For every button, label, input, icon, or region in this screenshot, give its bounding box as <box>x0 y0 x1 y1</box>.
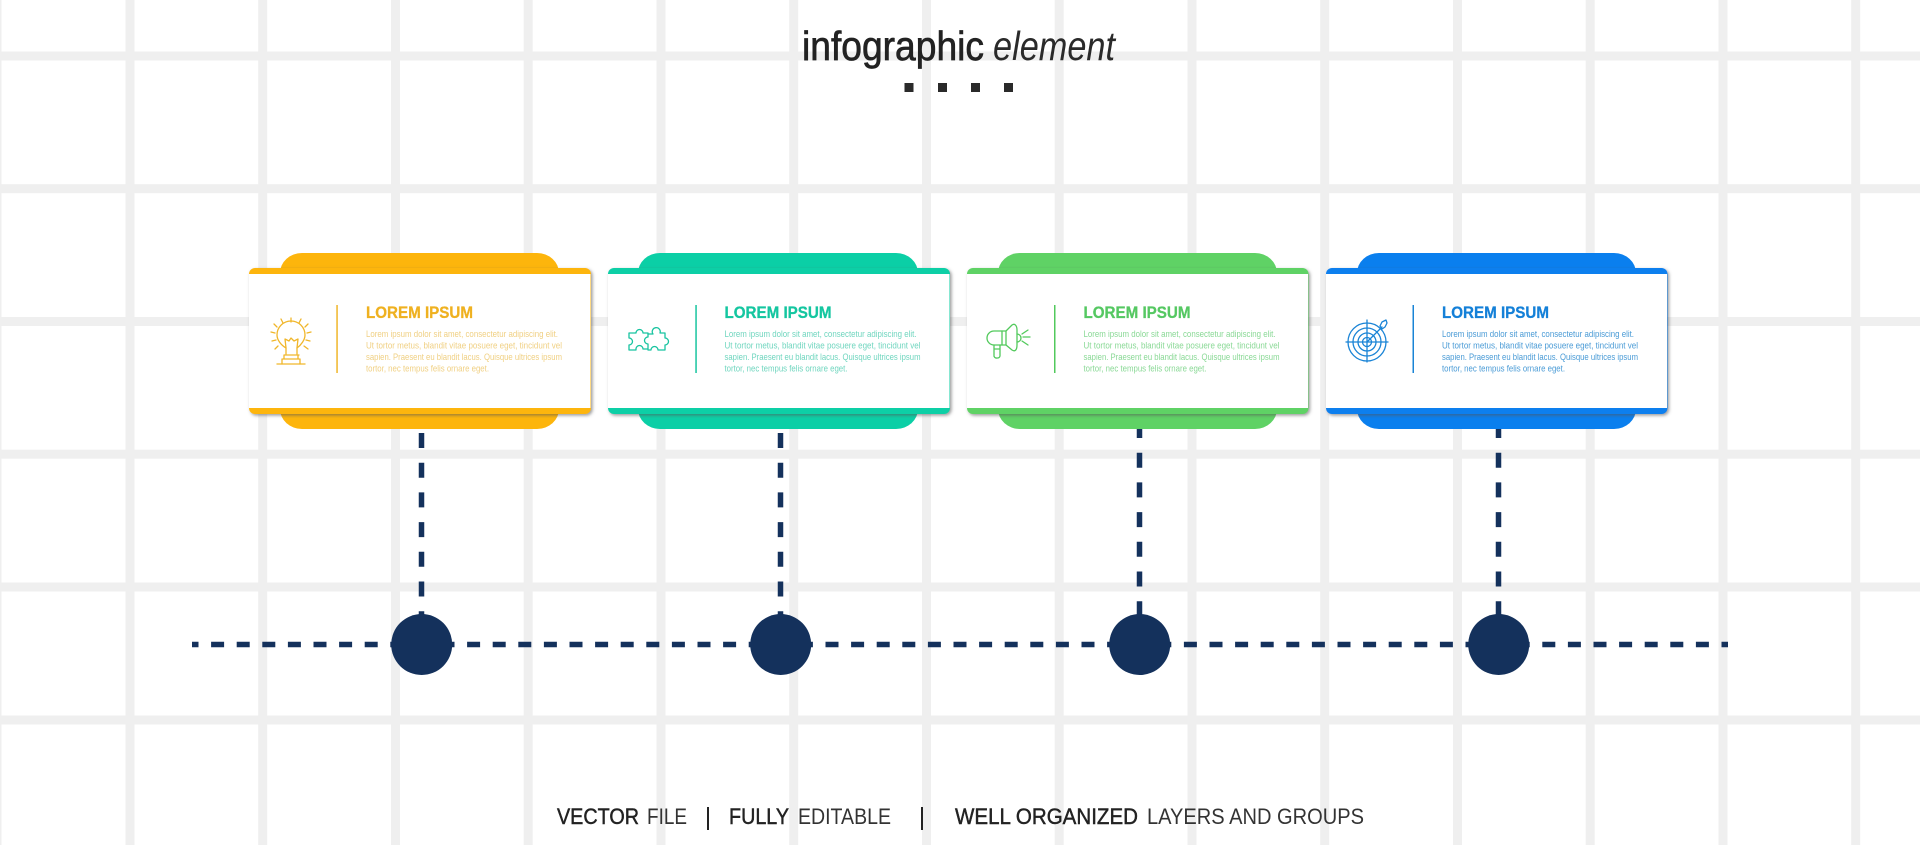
footer caption: FULLY <box>729 804 789 829</box>
icon: light bulb <box>271 318 311 364</box>
divider <box>1412 305 1414 373</box>
title dots <box>904 83 1013 92</box>
heading: LOREM IPSUM <box>1084 303 1190 322</box>
heading: LOREM IPSUM <box>724 303 832 322</box>
footer caption: FILE <box>647 804 687 829</box>
divider <box>1054 305 1056 373</box>
icon: puzzle <box>629 328 669 350</box>
body text: sapien. Praesent eu blandit lacus. Quisque ultrices ipsum <box>1442 352 1638 363</box>
title: element <box>993 23 1116 69</box>
connector 2 <box>778 433 783 620</box>
body text: Lorem ipsum dolor sit amet, consectetur adipiscing elit. <box>1084 329 1276 340</box>
connector 1 <box>419 433 424 620</box>
body text: tortor, nec tempus felis ornare eget. <box>1442 364 1565 374</box>
body text: Lorem ipsum dolor sit amet, consectetur adipiscing elit. <box>1442 329 1634 340</box>
title <box>802 23 1116 69</box>
body text: Lorem ipsum dolor sit amet, consectetur adipiscing elit. <box>724 329 916 340</box>
timeline node 3 <box>1109 614 1170 675</box>
body text: Ut tortor metus, blandit vitae posuere eget, tincidunt vel <box>724 340 920 352</box>
connector 4 <box>1496 429 1501 620</box>
panel: card 2 teal <box>608 253 950 429</box>
body text: sapien. Praesent eu blandit lacus. Quisque ultrices ipsum <box>366 352 562 363</box>
timeline node 1 <box>391 614 452 675</box>
footer caption: VECTOR <box>557 804 639 829</box>
panel: card 1 yellow <box>249 253 591 429</box>
icon: target <box>1346 320 1388 362</box>
title: infographic <box>802 23 984 69</box>
body text: Ut tortor metus, blandit vitae posuere eget, tincidunt vel <box>1084 340 1280 352</box>
heading: LOREM IPSUM <box>1442 303 1549 322</box>
footer caption: EDITABLE <box>798 804 891 829</box>
body text: Lorem ipsum dolor sit amet, consectetur adipiscing elit. <box>366 329 558 340</box>
body text: Ut tortor metus, blandit vitae posuere eget, tincidunt vel <box>1442 340 1638 352</box>
footer caption: LAYERS AND GROUPS <box>1147 804 1364 829</box>
body text <box>724 329 921 374</box>
body text: tortor, nec tempus felis ornare eget. <box>724 364 848 374</box>
body text <box>366 329 562 374</box>
body text: Ut tortor metus, blandit vitae posuere eget, tincidunt vel <box>366 340 562 352</box>
connector 3 <box>1137 429 1142 620</box>
body text: tortor, nec tempus felis ornare eget. <box>366 364 489 374</box>
horizontal timeline <box>192 642 1728 647</box>
divider <box>695 305 697 373</box>
body text: sapien. Praesent eu blandit lacus. Quisque ultrices ipsum <box>724 352 921 363</box>
icon: megaphone <box>987 324 1030 358</box>
divider <box>336 305 338 373</box>
footer caption: WELL ORGANIZED <box>955 804 1138 829</box>
timeline node 4 <box>1468 614 1529 675</box>
body text: sapien. Praesent eu blandit lacus. Quisque ultrices ipsum <box>1084 352 1280 363</box>
body text: tortor, nec tempus felis ornare eget. <box>1084 364 1206 374</box>
body text <box>1442 329 1638 374</box>
panel: card 4 blue <box>1326 253 1668 429</box>
body text <box>1084 329 1280 374</box>
panel: card 3 green <box>967 253 1308 429</box>
heading: LOREM IPSUM <box>366 303 473 322</box>
timeline node 2 <box>750 614 811 675</box>
footer caption <box>557 804 1364 830</box>
